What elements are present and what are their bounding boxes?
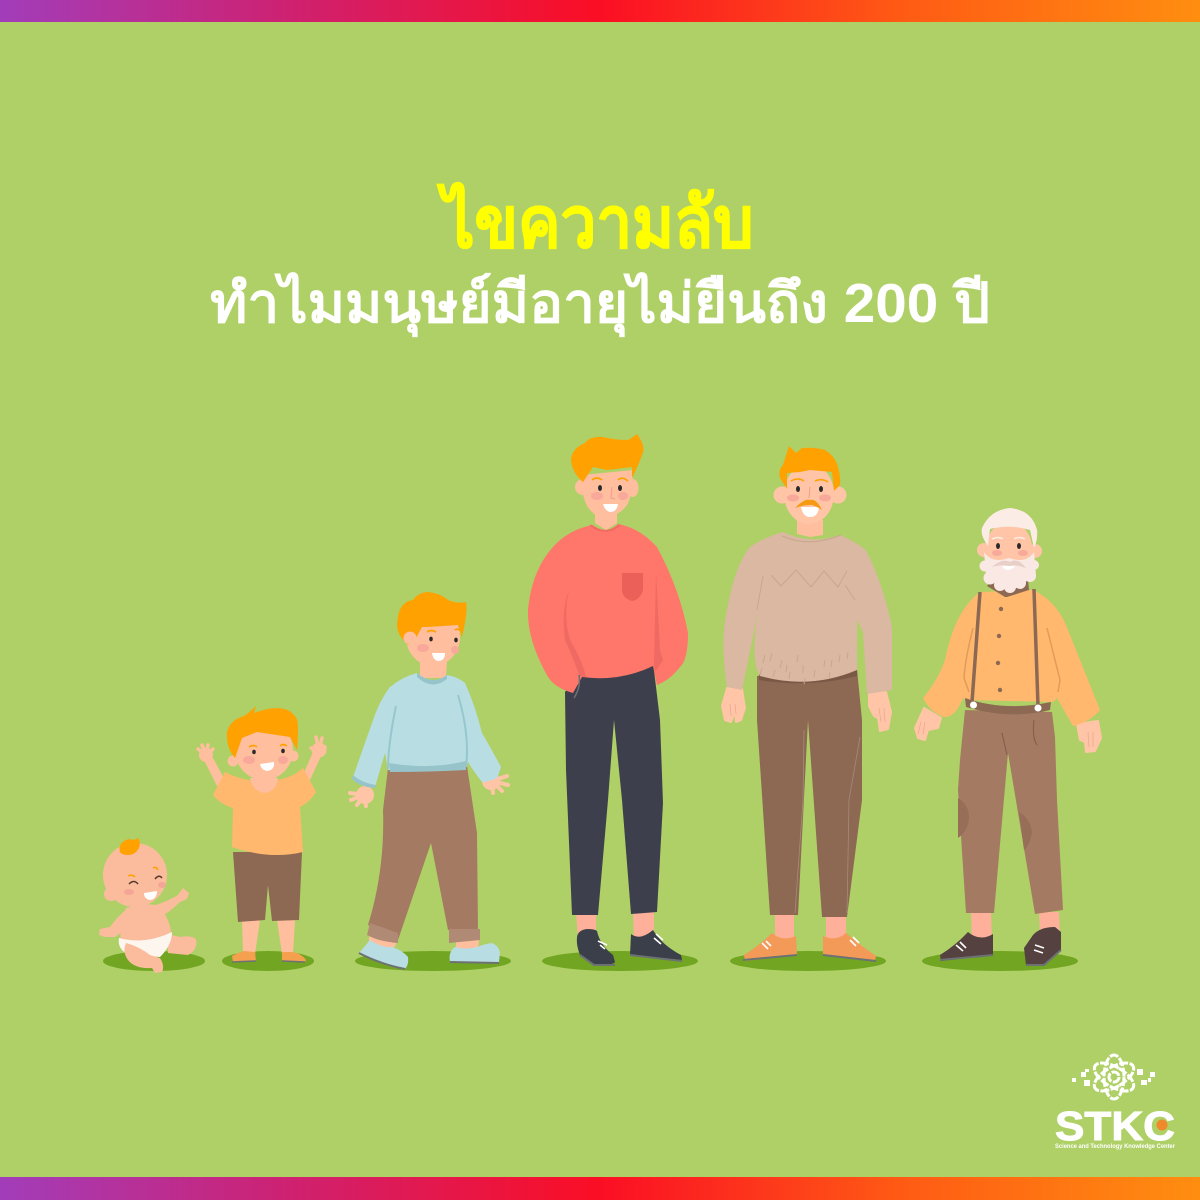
figure: middle-aged man xyxy=(722,446,892,971)
left hand xyxy=(722,688,745,722)
bottom gradient bar xyxy=(0,1177,1200,1200)
right hand xyxy=(869,692,891,731)
title xyxy=(210,181,990,338)
title line 2: ทำไมมนุษย์มีอายุไม่ยืนถึง 200 ปี xyxy=(210,271,990,338)
figure: elderly man xyxy=(915,508,1101,971)
icon: atom emblem xyxy=(1090,1055,1138,1099)
figure: boy xyxy=(350,592,511,971)
title line 1: ไขความลับ xyxy=(436,181,754,263)
right hand xyxy=(1077,721,1101,752)
beard xyxy=(980,552,1039,593)
figure: young man xyxy=(528,434,698,971)
top gradient bar xyxy=(0,0,1200,22)
right hand xyxy=(492,776,508,793)
logo wordmark: STKC xyxy=(1055,1103,1175,1149)
figure: baby xyxy=(99,838,205,973)
icon: pixel squares xyxy=(1072,1069,1155,1086)
logo: STKC xyxy=(1055,1055,1176,1150)
left hand xyxy=(350,793,366,806)
logo tagline: Science and Technology Knowledge Center xyxy=(1055,1144,1176,1150)
left hand xyxy=(915,708,941,740)
figure: toddler xyxy=(198,706,326,971)
